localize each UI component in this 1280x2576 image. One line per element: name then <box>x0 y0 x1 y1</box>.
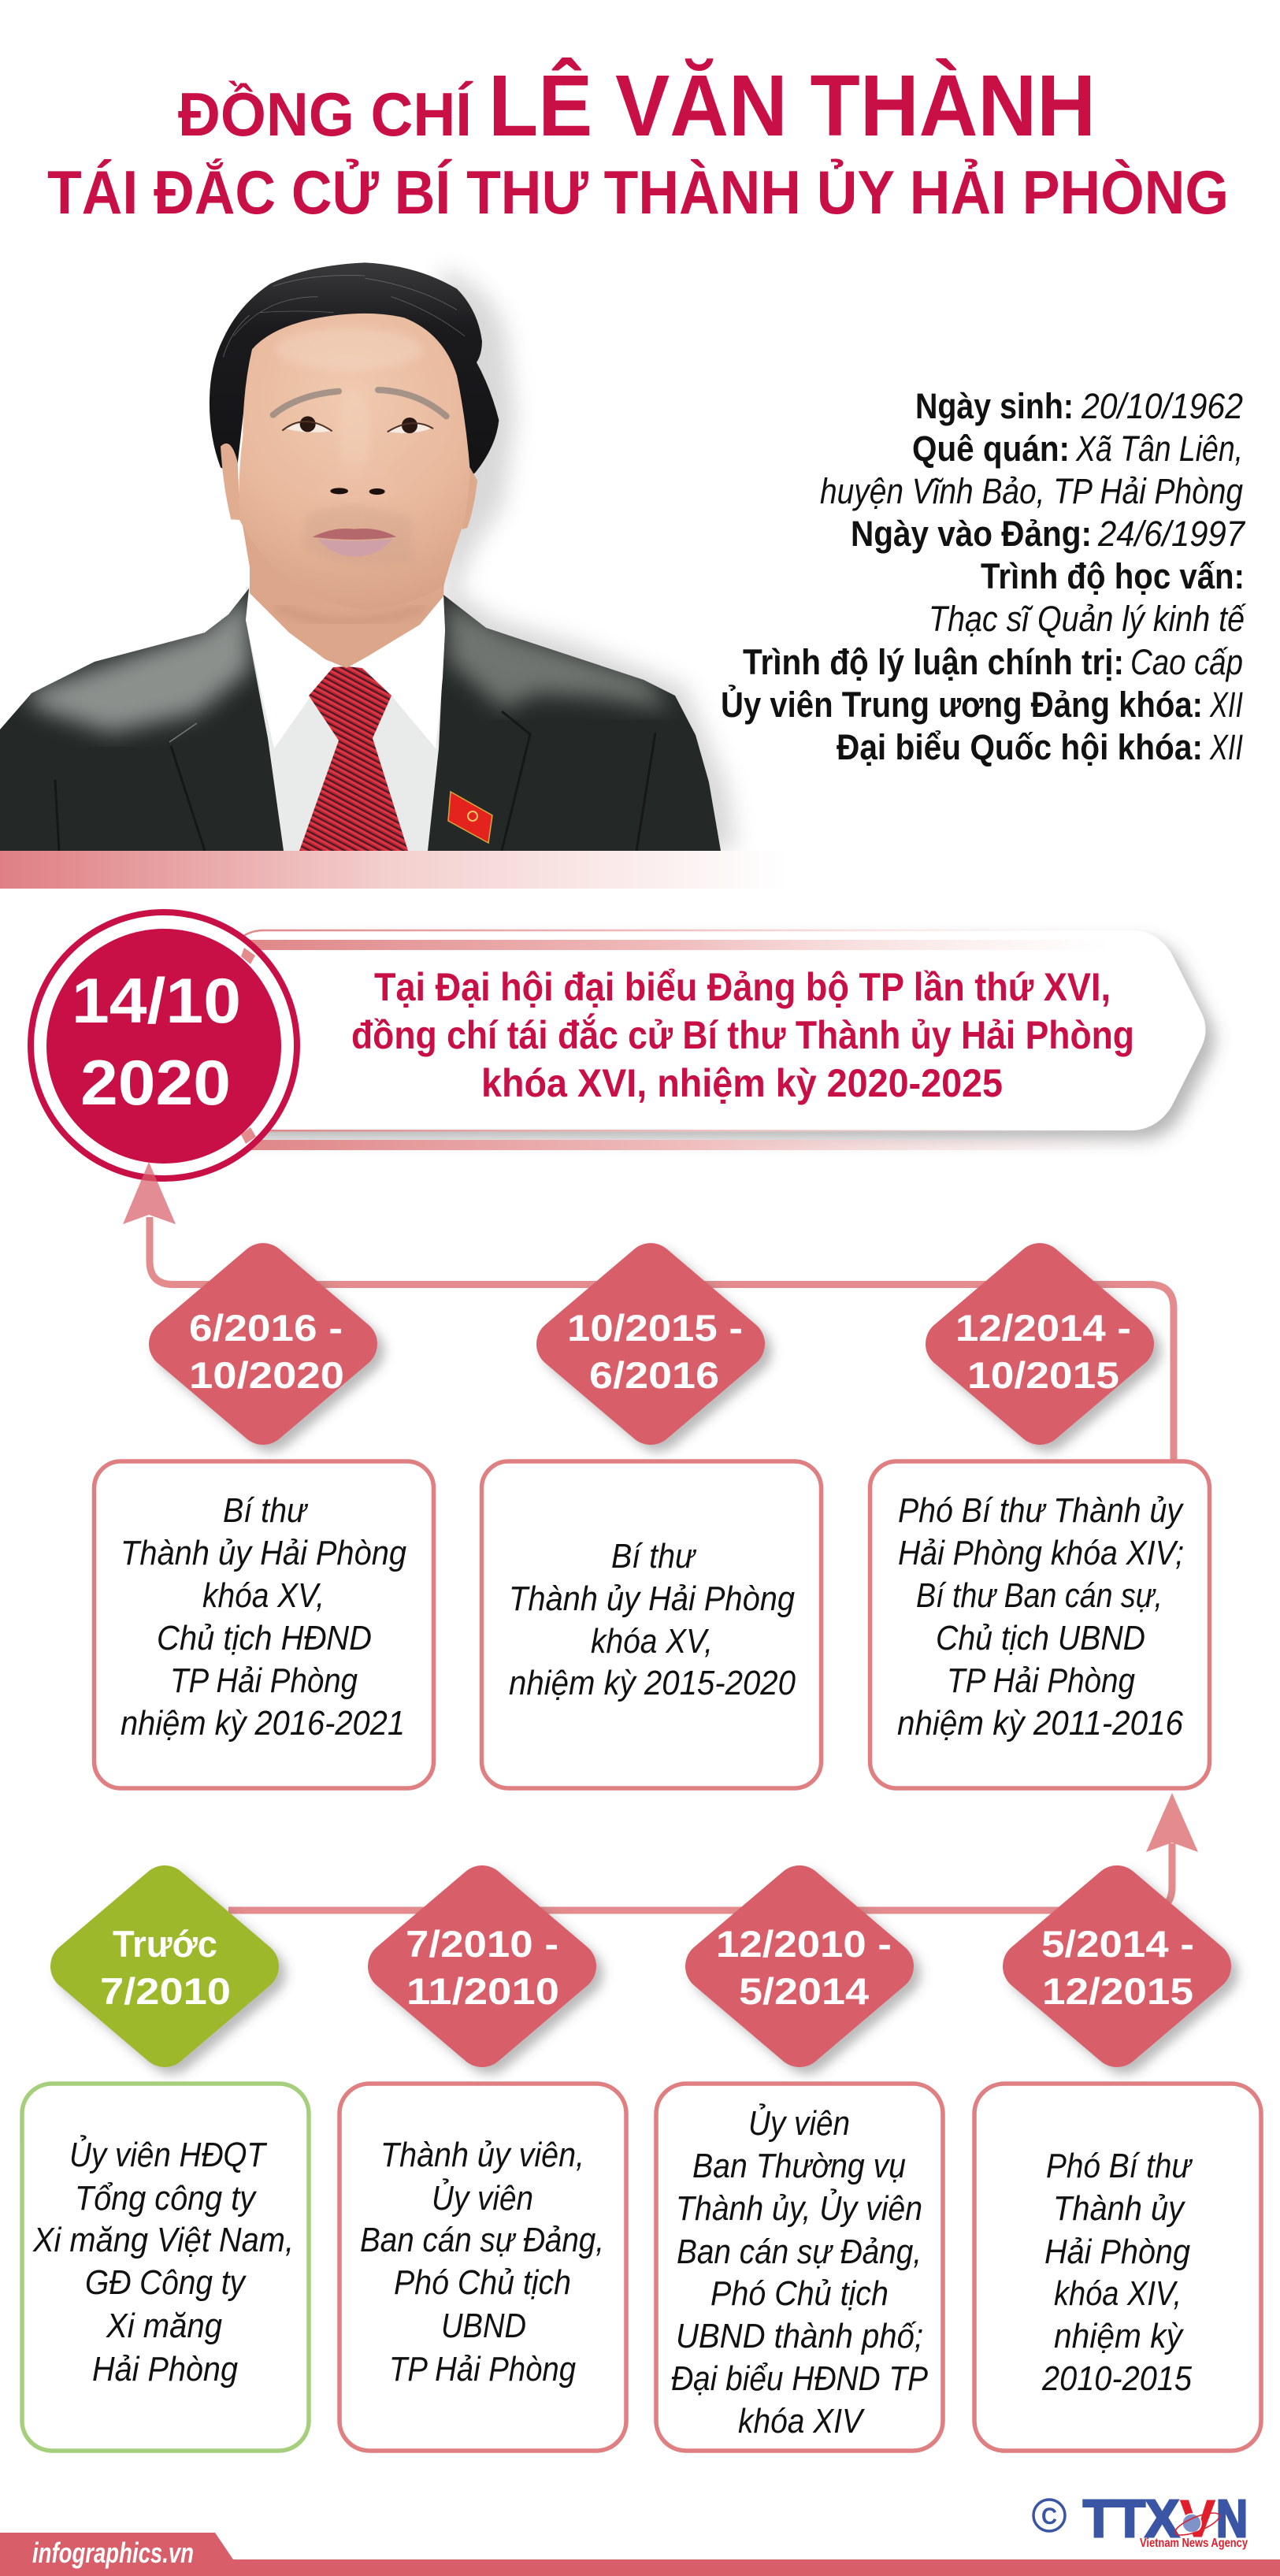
box: 12/2010 - 5/2014: Ban cán sự Đảng, <box>677 2233 922 2271</box>
info block: biography: Ngày sinh: <box>915 386 1074 426</box>
box: 12/2010 - 5/2014: Ủy viên <box>748 2103 850 2143</box>
info block: biography: Trình độ lý luận chính trị: <box>743 642 1124 682</box>
portrait photo illustration <box>0 262 736 851</box>
box: 5/2014 - 12/2015: Hải Phòng <box>1044 2233 1190 2271</box>
box: 5/2014 - 12/2015: 2010-2015 <box>1041 2359 1192 2398</box>
connector line: bottom row <box>228 1843 1172 1910</box>
info block: biography: Trình độ học vấn: <box>981 556 1245 596</box>
copyright mark <box>1033 2500 1065 2531</box>
collar <box>246 591 347 748</box>
box: 12/2014 - 10/2015: Chủ tịch UBND <box>936 1619 1145 1657</box>
box: 6/2016 - 10/2020: TP Hải Phòng <box>170 1661 358 1700</box>
box: 7/2010 - 11/2010 <box>339 2084 626 2451</box>
diamond: 12/2014 - 10/2015 <box>951 1268 1131 1420</box>
box: 12/2010 - 5/2014: khóa XIV <box>738 2402 865 2441</box>
box: 12/2010 - 5/2014: Đại biểu HĐND TP <box>671 2359 929 2398</box>
copyright mark: C <box>1041 2504 1057 2530</box>
box: 12/2014 - 10/2015 <box>870 1461 1210 1788</box>
box: 5/2014 - 12/2015: nhiệm kỳ <box>1054 2317 1185 2355</box>
banner text: khóa XVI, nhiệm kỳ 2020-2025 <box>481 1061 1003 1105</box>
box: before 7/2010: GĐ Công ty <box>85 2263 247 2302</box>
box: 12/2014 - 10/2015: nhiệm kỳ 2011-2016 <box>897 1704 1183 1743</box>
title: LÊ VĂN THÀNH <box>488 58 1096 154</box>
date circle: 14/10 <box>72 966 241 1037</box>
box: 6/2016 - 10/2020: khóa XV, <box>202 1576 325 1615</box>
box: 7/2010 - 11/2010: Ủy viên <box>432 2177 533 2218</box>
box: 6/2016 - 10/2020: Thành ủy Hải Phòng <box>121 1534 406 1572</box>
diamond: 6/2016 - 10/2020: 6/2016 - <box>189 1307 343 1349</box>
box: 10/2015 - 6/2016: khóa XV, <box>591 1622 713 1661</box>
jacket <box>0 588 721 851</box>
box: 12/2014 - 10/2015: TP Hải Phòng <box>947 1661 1135 1700</box>
diamond: 10/2015 - 6/2016: 6/2016 <box>589 1354 719 1396</box>
diamond: 7/2010 - 11/2010: 11/2010 <box>406 1970 559 2012</box>
box: 6/2016 - 10/2020: Chủ tịch HĐND <box>157 1619 372 1657</box>
logo: TTXVN: V <box>1180 2489 1215 2548</box>
info block: biography: Ngày vào Đảng: <box>851 514 1092 554</box>
info block: biography: 24/6/1997 <box>1097 514 1246 554</box>
diamond: 12/2010 - 5/2014: 5/2014 <box>739 1970 869 2012</box>
box: 6/2016 - 10/2020: nhiệm kỳ 2016-2021 <box>121 1704 405 1743</box>
diamond: 12/2014 - 10/2015: 12/2014 - <box>955 1307 1131 1349</box>
box: 12/2014 - 10/2015: Hải Phòng khóa XIV; <box>898 1534 1184 1572</box>
box: 10/2015 - 6/2016 <box>482 1461 821 1788</box>
diamond: 5/2014 - 12/2015 <box>1028 1891 1206 2042</box>
box: 12/2010 - 5/2014 <box>656 2084 943 2451</box>
box: 5/2014 - 12/2015 <box>974 2084 1261 2451</box>
title <box>47 58 1229 227</box>
badge <box>448 792 492 843</box>
title: ĐỒNG CHÍ <box>178 80 473 149</box>
info block: biography: Thạc sĩ Quản lý kinh tế <box>929 599 1247 639</box>
info block: biography: Xã Tân Liên, <box>1075 429 1243 469</box>
box: 12/2010 - 5/2014: Phó Chủ tịch <box>710 2274 889 2313</box>
gradient divider bar <box>0 851 788 889</box>
box: 6/2016 - 10/2020 <box>95 1461 433 1788</box>
lips <box>313 529 396 540</box>
info block: biography: Đại biểu Quốc hội khóa: <box>837 727 1203 767</box>
box: 12/2010 - 5/2014: Thành ủy, Ủy viên <box>676 2188 922 2228</box>
date circle <box>31 912 297 1179</box>
tie <box>299 666 408 851</box>
info block: biography: XII <box>1209 727 1243 767</box>
diamond: 12/2010 - 5/2014: 12/2010 - <box>716 1923 892 1965</box>
box: 12/2010 - 5/2014: Ban Thường vụ <box>692 2147 906 2185</box>
logo: TTXVN: Vietnam News Agency <box>1140 2537 1248 2550</box>
diamond: 7/2010 - 11/2010 <box>393 1891 571 2042</box>
box: before 7/2010: Hải Phòng <box>92 2350 238 2389</box>
box: before 7/2010 <box>22 2084 309 2451</box>
brows <box>273 392 339 415</box>
info block: biography: Quê quán: <box>912 429 1070 469</box>
box: before 7/2010: Ủy viên HĐQT <box>69 2134 268 2174</box>
banner text: Tại Đại hội đại biểu Đảng bộ TP lần thứ XVI, <box>374 965 1111 1009</box>
eyes <box>285 421 331 432</box>
diamond: 6/2016 - 10/2020: 10/2020 <box>189 1354 344 1396</box>
banner text <box>351 965 1134 1105</box>
diamond: 12/2010 - 5/2014 <box>710 1891 892 2042</box>
box: 5/2014 - 12/2015: Phó Bí thư <box>1046 2147 1193 2185</box>
box: 10/2015 - 6/2016: Bí thư <box>611 1537 697 1576</box>
shirt <box>246 587 445 851</box>
logo: TTXVN: N <box>1216 2489 1248 2548</box>
diamond: Trước 7/2010: Trước <box>113 1923 217 1965</box>
box: before 7/2010: Xi măng <box>106 2307 222 2345</box>
box: 5/2014 - 12/2015: khóa XIV, <box>1054 2274 1182 2313</box>
logo: TTXVN: TTX <box>1083 2489 1179 2548</box>
banner text: đồng chí tái đắc cử Bí thư Thành ủy Hải Phòng <box>351 1013 1134 1057</box>
neck <box>241 512 447 668</box>
info block: biography: Ủy viên Trung ương Đảng khóa: <box>721 685 1203 725</box>
box: 7/2010 - 11/2010: TP Hải Phòng <box>389 2350 576 2389</box>
ears <box>221 444 240 520</box>
box: 10/2015 - 6/2016: Thành ủy Hải Phòng <box>509 1579 795 1618</box>
box: 12/2014 - 10/2015: Phó Bí thư Thành ủy <box>898 1491 1185 1530</box>
box: 7/2010 - 11/2010: Phó Chủ tịch <box>394 2263 571 2302</box>
banner: 14/10/2020 event <box>235 930 1205 1150</box>
diamond: 10/2015 - 6/2016 <box>562 1268 743 1420</box>
box: 6/2016 - 10/2020: Bí thư <box>223 1491 309 1530</box>
face <box>239 314 470 611</box>
info block: biography: Cao cấp <box>1130 642 1243 682</box>
arrow up to date circle <box>123 1162 176 1224</box>
box: 10/2015 - 6/2016: nhiệm kỳ 2015-2020 <box>509 1664 796 1702</box>
diamond: Trước 7/2010: 7/2010 <box>100 1970 231 2012</box>
connector line: top row <box>150 1217 1174 1460</box>
box: 7/2010 - 11/2010: Thành ủy viên, <box>380 2136 584 2174</box>
box: 7/2010 - 11/2010: Ban cán sự Đảng, <box>360 2221 604 2259</box>
box: 12/2010 - 5/2014: UBND thành phố; <box>676 2317 923 2355</box>
info block: biography: XII <box>1209 685 1243 725</box>
box: 7/2010 - 11/2010: UBND <box>441 2307 526 2345</box>
footer bar <box>0 2533 1280 2576</box>
info block: biography <box>721 386 1247 767</box>
nose <box>317 462 398 500</box>
hair <box>210 262 499 478</box>
box: 5/2014 - 12/2015: Thành ủy <box>1053 2189 1186 2228</box>
diamond: 5/2014 - 12/2015: 12/2015 <box>1042 1970 1193 2012</box>
arrow up to top row <box>1146 1793 1198 1852</box>
box: 12/2014 - 10/2015: Bí thư Ban cán sự, <box>916 1576 1163 1615</box>
info block: biography: 20/10/1962 <box>1081 386 1243 426</box>
head <box>210 262 499 611</box>
diamond: 5/2014 - 12/2015: 5/2014 - <box>1041 1923 1194 1965</box>
diamond: 12/2014 - 10/2015: 10/2015 <box>967 1354 1119 1396</box>
footer bar: infographics.vn <box>32 2537 194 2569</box>
diamond: 7/2010 - 11/2010: 7/2010 - <box>406 1923 558 1965</box>
diamond: 10/2015 - 6/2016: 10/2015 - <box>567 1307 743 1349</box>
box: before 7/2010: Tổng công ty <box>75 2179 258 2218</box>
diamond: 6/2016 - 10/2020 <box>174 1268 352 1420</box>
box: before 7/2010: Xi măng Việt Nam, <box>32 2221 294 2259</box>
diamond: Trước 7/2010 <box>76 1891 254 2042</box>
date circle: 2020 <box>80 1048 231 1119</box>
logo: TTXVN <box>1033 2489 1248 2550</box>
